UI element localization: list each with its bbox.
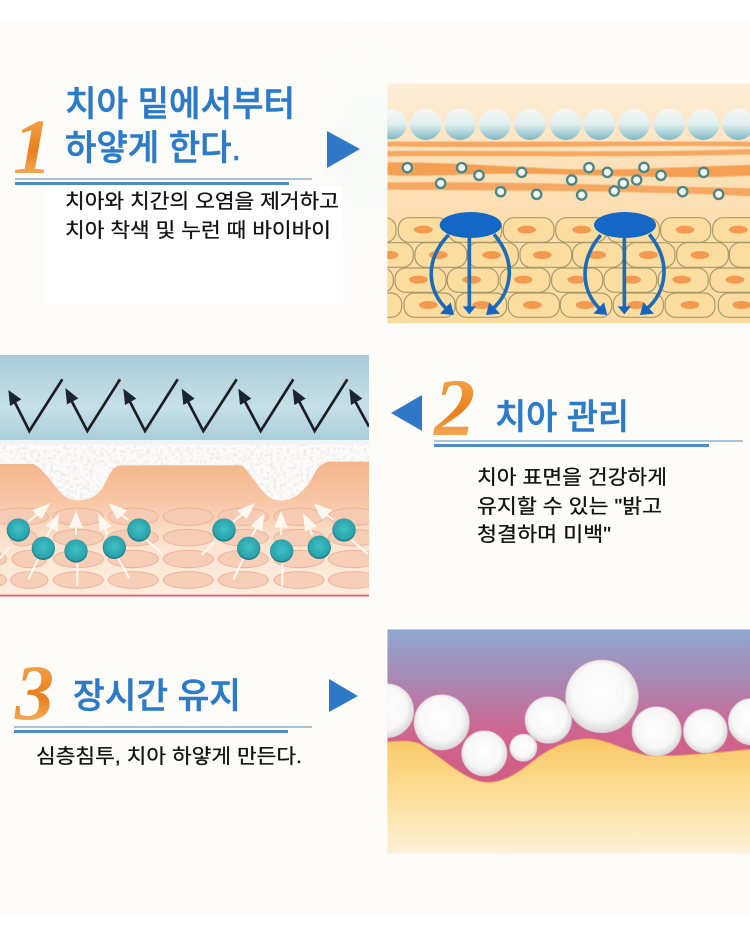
enamel spheres	[377, 109, 750, 140]
yellow wavy surface	[387, 739, 750, 853]
arrow: left to panel 2	[391, 395, 422, 431]
panel 1: tooth layers diagram	[387, 84, 750, 324]
section 1: text block	[13, 85, 339, 242]
description: section 2	[477, 466, 667, 546]
blue absorption arrows, right	[585, 234, 664, 315]
title: section 1: 하얗게 한다.	[65, 129, 241, 168]
number 3: 3	[14, 649, 54, 736]
blue absorption arrows, left	[431, 234, 509, 315]
title: section 2: 치아 관리	[495, 398, 629, 437]
teal particles	[7, 518, 356, 563]
title: section 3: 장시간 유지	[73, 677, 241, 716]
small particles	[403, 163, 723, 200]
section 3: text block	[14, 649, 312, 768]
description: section 3: 심층침투, 치아 하얗게 만든다.	[36, 745, 302, 768]
description: section 1	[65, 190, 339, 242]
white up arrows	[0, 505, 368, 586]
blue ellipses	[440, 212, 656, 238]
foam layer	[0, 440, 369, 503]
description: section 1: 치아 착색 및 누런 때 바이바이	[65, 219, 331, 242]
skin layer	[0, 462, 369, 580]
description: section 1: 치아와 치간의 오염을 제거하고	[65, 190, 339, 213]
description: section 2: 유지할 수 있는 "밝고	[477, 495, 662, 518]
panel 2: surface care diagram	[0, 355, 378, 597]
arrow: right to panel 3	[329, 679, 358, 712]
black check arrows	[8, 379, 369, 431]
section 2: text block	[433, 362, 743, 546]
fibre bands	[387, 142, 750, 196]
title: section 1	[65, 85, 295, 168]
white spheres	[360, 660, 750, 776]
description: section 2: 청결하며 미백"	[477, 523, 611, 546]
arrow: right to panel 1	[327, 131, 360, 168]
cell layers	[343, 218, 750, 317]
skin cells	[0, 508, 378, 588]
number 1: 1	[13, 103, 52, 190]
description: section 2: 치아 표면을 건강하게	[477, 466, 667, 489]
panel 3: lasting whiteness diagram	[360, 629, 750, 853]
title: section 1: 치아 밑에서부터	[65, 85, 295, 124]
red base line	[0, 594, 369, 597]
number 2: 2	[433, 362, 475, 453]
cell nuclei	[382, 226, 750, 309]
